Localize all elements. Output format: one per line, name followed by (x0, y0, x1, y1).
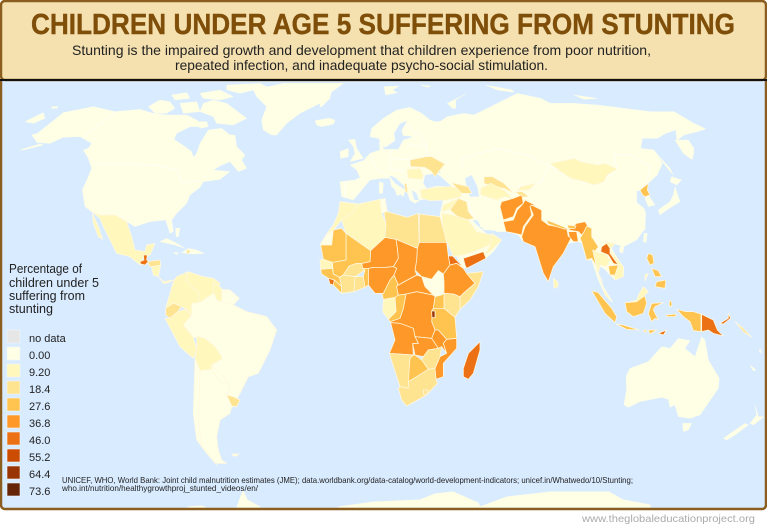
egypt (419, 214, 447, 242)
eritrea (448, 256, 463, 267)
legend values (29, 333, 67, 498)
legend title: suffering from (9, 289, 85, 303)
south and southeast asia land (480, 140, 694, 302)
laos (601, 243, 618, 265)
arabian peninsula (442, 213, 502, 268)
mauritania (321, 228, 346, 262)
south sudan (422, 271, 444, 297)
congo (388, 294, 406, 322)
legend title: Percentage of (9, 262, 82, 276)
ghana (354, 277, 365, 292)
cameroon (382, 275, 398, 299)
lesotho (423, 390, 428, 395)
liberia (333, 280, 342, 293)
indonesia islands (592, 291, 617, 323)
south africa (398, 368, 437, 406)
algeria (342, 199, 386, 251)
legend values: 27.6 (29, 401, 50, 413)
zambia (413, 337, 438, 357)
choropleth: americas (92, 212, 277, 465)
faint land borders (83, 112, 651, 218)
gabon (383, 297, 396, 319)
angola (389, 323, 418, 355)
legend values: 9.20 (29, 367, 50, 379)
inland seas (412, 170, 479, 200)
legend (7, 262, 99, 498)
legend title (9, 262, 99, 316)
sudan (415, 242, 450, 279)
nigeria (368, 267, 397, 293)
subtitle: repeated infection, and inadequate psycho-social stimulation. (175, 57, 548, 73)
source note (61, 475, 633, 493)
legend values: 36.8 (29, 418, 50, 430)
website credit: www.theglobaleducationproject.org (581, 513, 755, 525)
afghanistan (500, 195, 523, 220)
yemen (463, 252, 486, 268)
burkina faso (343, 263, 365, 277)
niger (362, 237, 398, 268)
choropleth: africa (320, 198, 483, 406)
source note: who.int/nutrition/healthygrowthproj_stunted_videos/en/ (61, 483, 259, 493)
mozambique (435, 338, 457, 379)
central asia and mongolia (481, 158, 617, 200)
guinea (321, 268, 342, 287)
south america (165, 272, 277, 465)
burundi and rwanda (432, 311, 435, 318)
subtitle: Stunting is the impaired growth and development that children experience from poor nutrition, (72, 42, 651, 58)
democratic republic of congo (390, 292, 435, 338)
chad (393, 239, 417, 285)
sierra leone (328, 278, 334, 285)
morocco (326, 202, 358, 235)
central america and mexico (92, 212, 190, 283)
legend values: 18.4 (29, 384, 50, 396)
legend values: 46.0 (29, 435, 50, 447)
senegal (320, 259, 332, 269)
north america land (20, 83, 343, 255)
west papua (677, 309, 701, 332)
india (522, 205, 575, 282)
libya (384, 212, 419, 248)
russia and north asia land (384, 85, 706, 230)
legend title: stunting (9, 302, 53, 316)
legend values: 64.4 (29, 469, 50, 481)
namibia (389, 353, 413, 388)
somalia (460, 272, 483, 309)
mongolia (550, 158, 617, 185)
korea north (640, 183, 650, 197)
ecuador (166, 303, 182, 318)
uganda (433, 293, 444, 308)
europe land (320, 90, 490, 220)
central african republic (397, 275, 433, 295)
legend values: 0.00 (29, 350, 50, 362)
kenya (444, 293, 460, 317)
zimbabwe (422, 347, 442, 369)
greenland (253, 83, 343, 135)
south and southeast asia shaded countries (500, 183, 752, 337)
land base: unshaded landmasses (20, 83, 764, 507)
malawi (432, 330, 447, 353)
madagascar (463, 342, 480, 379)
choropleth: eurasia (404, 157, 752, 337)
antarctica (339, 492, 650, 507)
legend values: no data (29, 333, 67, 345)
legend title: children under 5 (9, 276, 99, 290)
legend values: 73.6 (29, 486, 50, 498)
papua new guinea (702, 314, 723, 336)
australia and oceania land (624, 337, 764, 440)
iran and arabia land (440, 187, 513, 268)
cote d'ivoire (339, 275, 355, 293)
pakistan (503, 200, 535, 235)
legend values: 55.2 (29, 452, 50, 464)
botswana (408, 355, 428, 382)
legend swatches (7, 330, 20, 496)
source note: UNICEF, WHO, World Bank: Joint child malnutrition estimates (JME); data.worldbank.org/data-catalog/world-development-indicators; unicef.in/Whatwedo/10/Stunting; (62, 475, 633, 485)
europe and turkey shaded countries (404, 157, 474, 220)
togo and benin (363, 268, 368, 287)
ethiopia (443, 263, 475, 297)
guatemala (140, 255, 148, 265)
subtitle (72, 42, 651, 73)
panel: header (0, 1, 767, 81)
tanzania (432, 308, 457, 339)
tunisia (380, 198, 387, 213)
western sahara (320, 230, 333, 245)
myanmar (580, 226, 598, 267)
mali (332, 233, 371, 277)
